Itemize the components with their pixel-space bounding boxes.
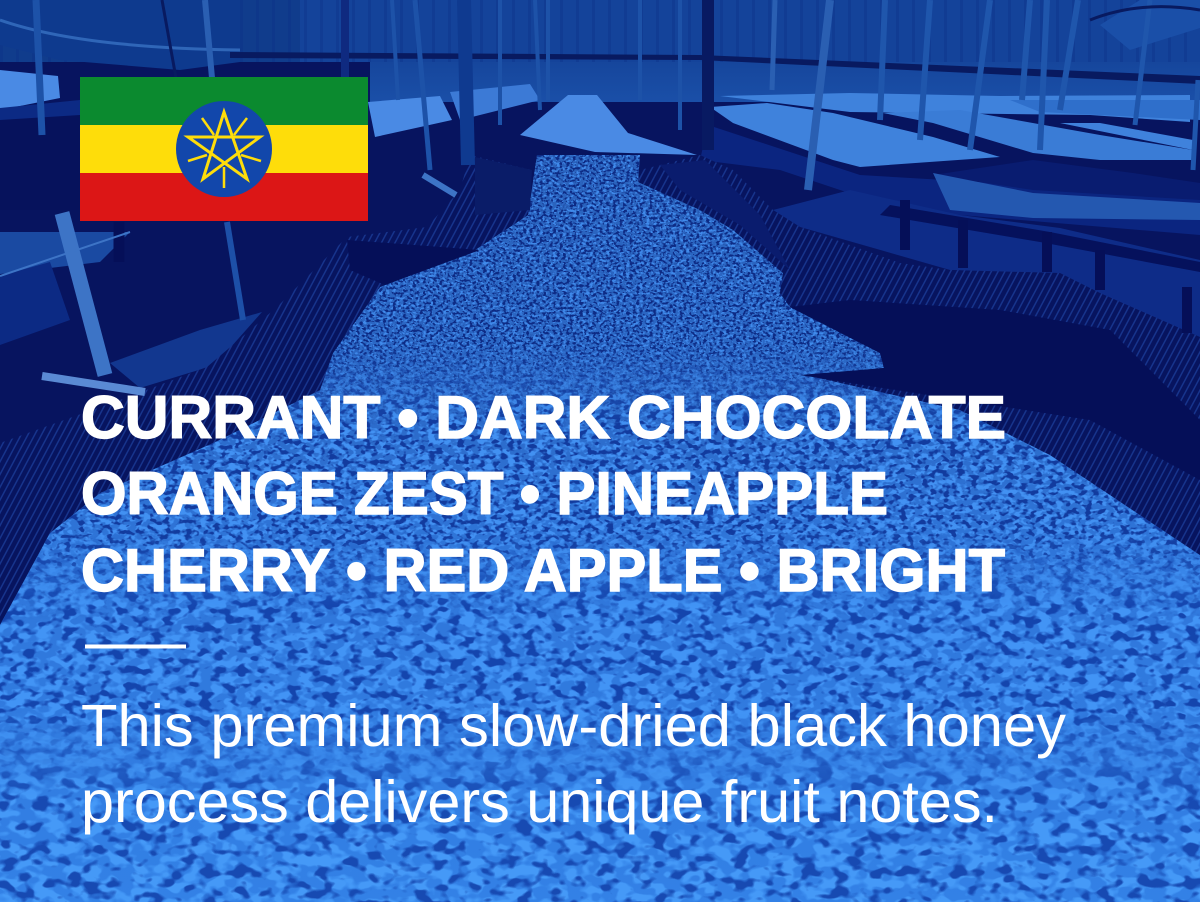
net left (0, 155, 532, 622)
description text (81, 693, 1067, 835)
posts (0, 0, 1200, 392)
far beds right (700, 93, 1200, 340)
heading: flavour notes: ORANGE ZEST • PINEAPPLE (81, 460, 888, 527)
divider rule (85, 644, 186, 648)
far white bed centre (520, 95, 697, 155)
description text: process delivers unique fruit notes. (81, 769, 998, 835)
description text: This premium slow-dried black honey (81, 693, 1067, 759)
net right (638, 155, 1200, 555)
flag: Ethiopia (80, 77, 368, 221)
back wall (370, 62, 1200, 102)
shade canopy (0, 0, 1200, 70)
heading: flavour notes: CHERRY • RED APPLE • BRIGHT (81, 537, 1005, 604)
heading: flavour notes: CURRANT • DARK CHOCOLATE (81, 384, 1006, 451)
heading: flavour notes (81, 384, 1006, 604)
emblem: blue disc with star (176, 101, 272, 197)
far beds left (0, 70, 540, 388)
